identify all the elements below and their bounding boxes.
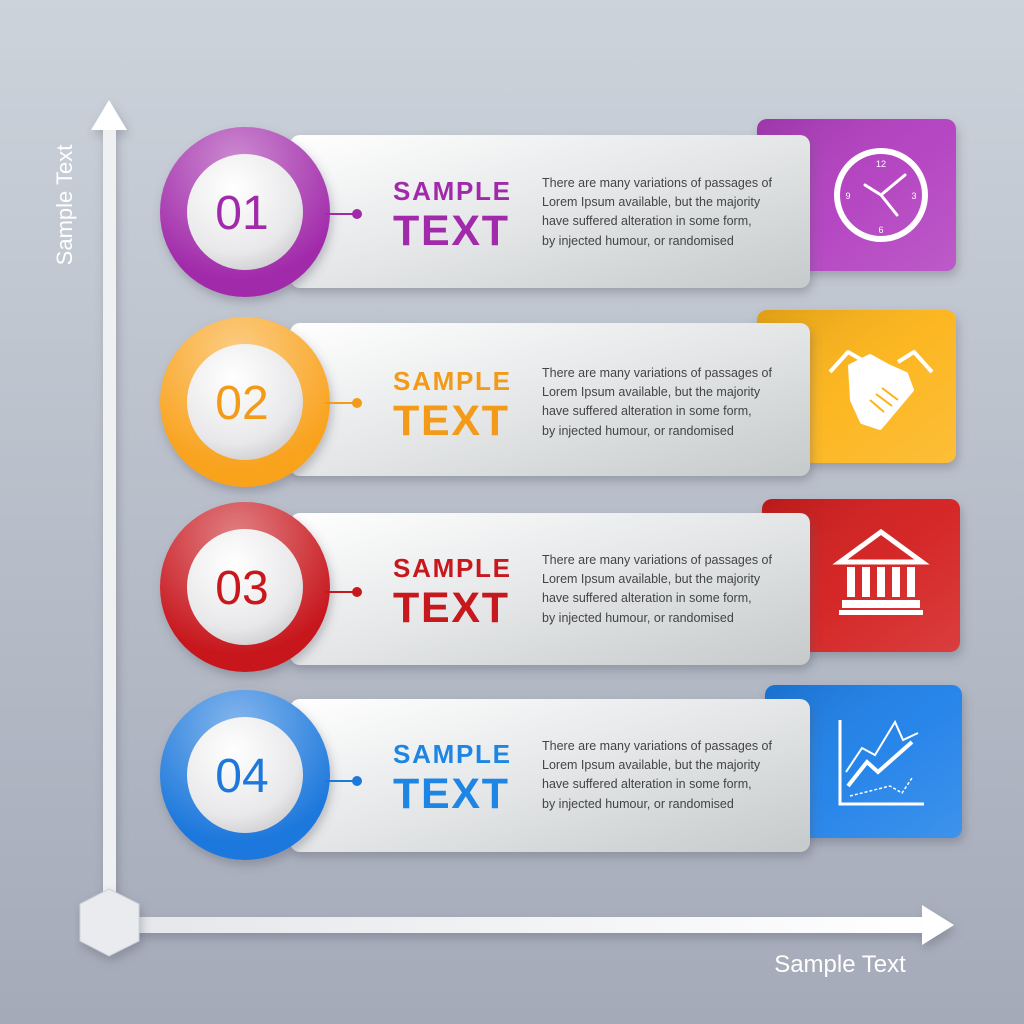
heading [393, 176, 510, 255]
row 4 [160, 685, 962, 860]
origin hexagon [80, 889, 139, 956]
x axis arrow [105, 905, 954, 945]
banner [290, 135, 810, 288]
heading [393, 366, 510, 445]
paragraph: have suffered alteration in some form, [542, 214, 752, 228]
row 2 [160, 310, 956, 487]
banner [290, 323, 810, 476]
ball 04 [160, 690, 362, 860]
paragraph [542, 366, 773, 438]
ball 01: 01 [215, 187, 269, 240]
y axis label: Sample Text [52, 145, 77, 265]
ball 01 [160, 127, 362, 297]
paragraph: Lorem Ipsum available, but the majority [542, 385, 761, 399]
heading: TEXT [393, 207, 508, 255]
x axis label: Sample Text [774, 951, 906, 978]
ball 03 [160, 502, 362, 672]
paragraph: by injected humour, or randomised [542, 424, 734, 438]
paragraph [542, 553, 773, 625]
tile: handshake [757, 310, 956, 463]
paragraph: by injected humour, or randomised [542, 234, 734, 248]
paragraph: There are many variations of passages of [542, 176, 773, 190]
y axis arrow [91, 100, 127, 910]
banner [290, 513, 810, 665]
heading: SAMPLE [393, 176, 510, 206]
paragraph: by injected humour, or randomised [542, 797, 734, 811]
ball 02 [160, 317, 362, 487]
heading: SAMPLE [393, 739, 510, 769]
heading [393, 553, 510, 632]
heading: SAMPLE [393, 366, 510, 396]
ball 03: 03 [215, 562, 269, 615]
heading: SAMPLE [393, 553, 510, 583]
paragraph: There are many variations of passages of [542, 739, 773, 753]
tile: clock: 12 [876, 159, 886, 169]
heading [393, 739, 510, 818]
paragraph [542, 739, 773, 811]
tile: clock: 9 [845, 191, 851, 201]
tile: clock: 6 [878, 225, 884, 235]
heading: TEXT [393, 397, 508, 445]
tile: bank [762, 499, 960, 652]
paragraph: have suffered alteration in some form, [542, 777, 752, 791]
paragraph: Lorem Ipsum available, but the majority [542, 572, 761, 586]
paragraph: There are many variations of passages of [542, 366, 773, 380]
ball 04: 04 [215, 750, 269, 803]
paragraph: Lorem Ipsum available, but the majority [542, 195, 761, 209]
paragraph: have suffered alteration in some form, [542, 404, 752, 418]
heading: TEXT [393, 770, 508, 818]
paragraph: Lorem Ipsum available, but the majority [542, 758, 761, 772]
row 1 [160, 119, 956, 297]
row 3 [160, 499, 960, 672]
heading: TEXT [393, 584, 508, 632]
tile: clock: 3 [911, 191, 917, 201]
paragraph: There are many variations of passages of [542, 553, 773, 567]
paragraph: by injected humour, or randomised [542, 611, 734, 625]
paragraph: have suffered alteration in some form, [542, 591, 752, 605]
banner [290, 699, 810, 852]
tile: clock [757, 119, 956, 271]
ball 02: 02 [215, 377, 269, 430]
tile: chart [765, 685, 962, 838]
paragraph [542, 176, 773, 248]
